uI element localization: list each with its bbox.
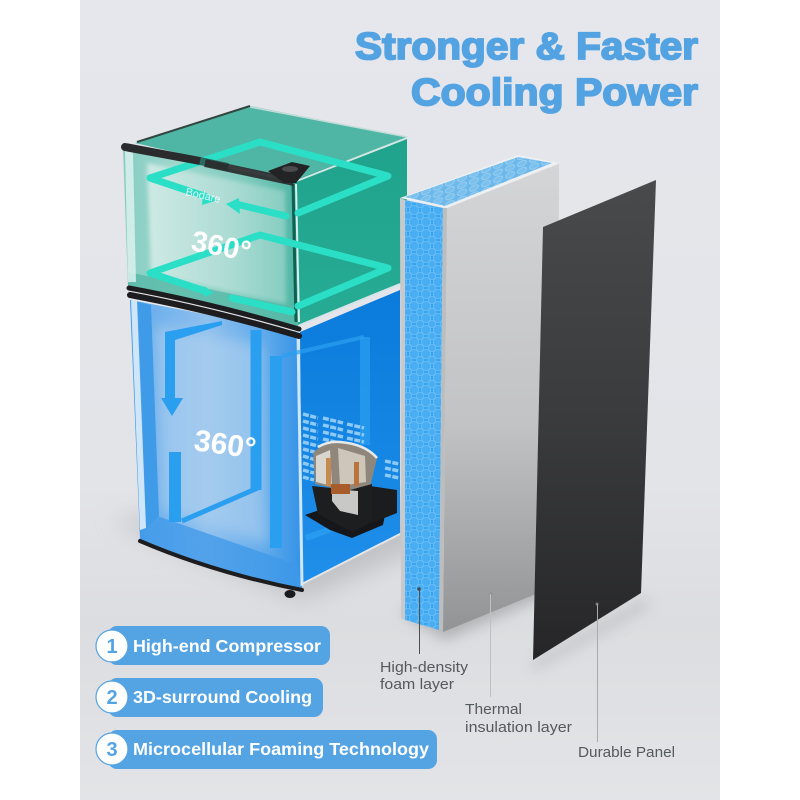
vent grille bbox=[303, 414, 399, 480]
feature pill 3: microcellular foaming technology: 3 bbox=[106, 739, 118, 761]
callout: durable panel: Durable Panel bbox=[578, 745, 675, 761]
feature pill 1: high-end compressor: High-end Compressor bbox=[133, 636, 321, 656]
callout: thermal insulation layer bbox=[465, 592, 572, 736]
title: Cooling Power bbox=[411, 72, 698, 114]
refrigerator 360 label: 360° bbox=[192, 424, 258, 466]
foam front face bbox=[405, 200, 443, 630]
refrigerator compartment bbox=[130, 284, 400, 588]
fridge foot bbox=[284, 590, 296, 598]
floor shadows bbox=[110, 500, 650, 670]
compressor bbox=[305, 442, 397, 538]
brand text: Bodare bbox=[184, 186, 222, 206]
feature pill 2: 3D-surround cooling: 2 bbox=[106, 687, 118, 709]
feature pill 1: high-end compressor: 1 bbox=[106, 636, 118, 658]
background panel bbox=[80, 0, 720, 800]
title bbox=[355, 26, 698, 114]
durable dark panel bbox=[533, 180, 656, 660]
feature pill 3: microcellular foaming technology: Microcellular Foaming Technology bbox=[133, 739, 429, 759]
title: Stronger & Faster bbox=[355, 26, 698, 68]
callout: high-density foam layer: High-density bbox=[380, 660, 469, 676]
freezer airflow arrows bbox=[150, 142, 388, 312]
callout: thermal insulation layer: Thermal bbox=[465, 702, 522, 718]
callout: durable panel bbox=[578, 602, 675, 761]
callout: high-density foam layer: foam layer bbox=[380, 677, 454, 693]
callout: high-density foam layer bbox=[380, 587, 469, 693]
feature pill 1: high-end compressor bbox=[96, 626, 330, 665]
callout: thermal insulation layer: insulation layer bbox=[465, 720, 572, 736]
thermal layer side bbox=[443, 164, 559, 632]
refrigerator airflow arrows bbox=[161, 321, 365, 548]
feature pill 2: 3D-surround cooling: 3D-surround Cooling bbox=[133, 687, 312, 707]
feature pill 3: microcellular foaming technology bbox=[96, 730, 437, 769]
foam top face bbox=[400, 155, 559, 208]
freezer compartment bbox=[123, 106, 407, 328]
refrigerator bbox=[123, 106, 407, 598]
gaskets bbox=[129, 288, 302, 590]
feature pill 2: 3D-surround cooling bbox=[96, 678, 323, 717]
door trim and handle bbox=[125, 147, 310, 183]
freezer 360 label: 360° bbox=[189, 225, 254, 268]
foam insulation block bbox=[400, 155, 559, 632]
